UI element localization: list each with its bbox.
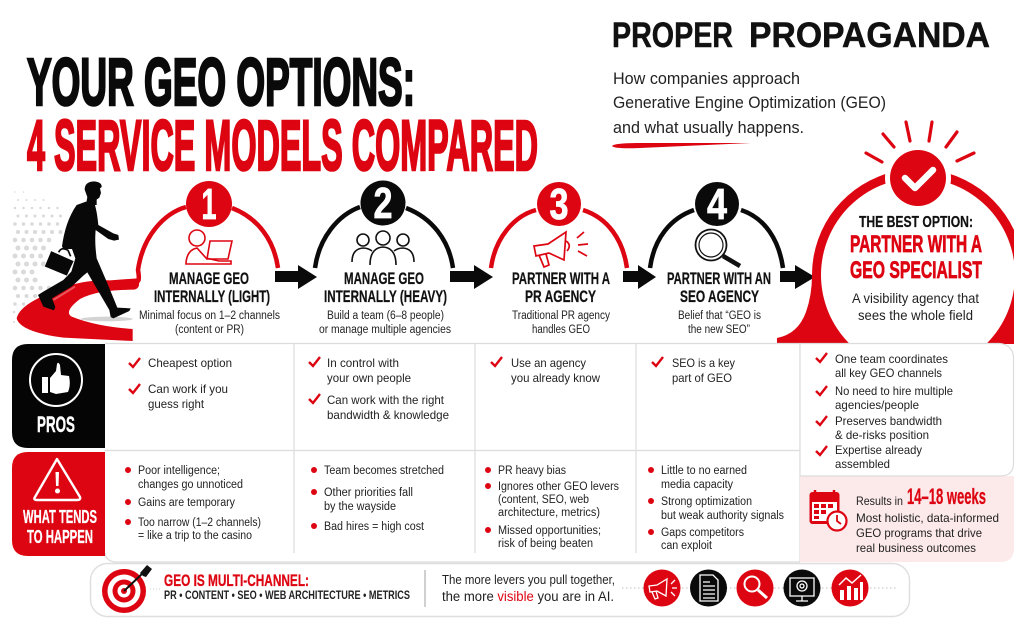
result text — [856, 484, 999, 555]
what tends to happen: column 2: by the wayside — [324, 501, 396, 513]
description: Belief that “GEO is — [678, 310, 761, 322]
title: YOUR GEO OPTIONS: — [27, 45, 415, 120]
number badge 3 — [537, 180, 581, 229]
heading: GEO IS MULTI-CHANNEL: — [164, 571, 309, 590]
number badge 3: 3 — [550, 180, 568, 229]
what tends to happen: column 2 — [311, 465, 444, 533]
what tends to happen: column 1: Too narrow (1–2 channels) — [138, 517, 261, 529]
bottom banner — [90, 564, 910, 616]
row label: pros: PROS — [37, 412, 75, 437]
pros: column 2: In control with — [327, 356, 399, 370]
row label: what tends to happen — [12, 452, 105, 556]
description — [139, 310, 280, 336]
panel: best option pros card — [800, 344, 1014, 476]
what tends to happen: column 4: Strong optimization — [661, 496, 752, 508]
halftone dots — [14, 192, 62, 322]
number badge 2: 2 — [374, 179, 392, 228]
what tends to happen: column 3: architecture, metrics) — [498, 507, 600, 519]
description — [852, 290, 979, 323]
number badge 1 — [186, 180, 232, 229]
pros: column 1 — [129, 356, 232, 411]
step 2: manage GEO internally (heavy) — [315, 179, 453, 336]
pros: column 3: Use an agency — [511, 356, 586, 370]
what tends to happen: column 2: Other priorities fall — [324, 487, 413, 499]
logo: Proper Propaganda: PROPAGANDA — [749, 16, 990, 55]
panel: result — [800, 476, 1014, 562]
heading — [154, 269, 270, 306]
heading: PARTNER WITH A — [512, 269, 610, 288]
heading — [512, 269, 610, 306]
description: Build a team (6–8 people) — [327, 310, 444, 322]
what tends to happen: column 4: Little to no earned — [661, 465, 747, 477]
row label: what tends to happen: WHAT TENDS — [23, 507, 97, 527]
title — [27, 45, 538, 186]
eyebrow: THE BEST OPTION: — [859, 214, 973, 231]
what tends to happen: column 3 — [485, 465, 619, 550]
icon: web architecture monitor — [784, 570, 820, 606]
pros: column 2: bandwidth & knowledge — [327, 408, 449, 422]
heading: INTERNALLY (HEAVY) — [324, 287, 447, 306]
pros: best option: One team coordinates — [835, 352, 948, 366]
heading: INTERNALLY (LIGHT) — [154, 287, 270, 306]
panel: best option — [777, 122, 1024, 372]
what tends to happen: column 1: = like a trip to the casino — [138, 530, 252, 542]
arrow 4 — [780, 265, 815, 289]
subtitle — [612, 69, 886, 148]
number badge 1: 1 — [202, 180, 216, 229]
arrow 2 — [450, 265, 493, 289]
number badge 2 — [360, 179, 406, 228]
figure: walking businessman — [38, 181, 131, 318]
heading — [667, 269, 771, 306]
description — [512, 310, 610, 336]
pros: column 4 — [652, 356, 735, 385]
description: Traditional PR agency — [512, 310, 610, 322]
pros: column 2: Can work with the right — [327, 393, 445, 407]
description: sees the whole field — [858, 307, 973, 323]
heading: PARTNER WITH AN — [667, 269, 771, 288]
what tends to happen: column 2: Team becomes stretched — [324, 465, 444, 477]
number badge 4: 4 — [707, 180, 727, 229]
description — [319, 310, 451, 336]
row label: pros — [12, 344, 105, 448]
logo: Proper Propaganda: PROPER — [612, 16, 733, 55]
step 1: manage GEO internally (light) — [137, 180, 280, 336]
result text: Most holistic, data-informed — [856, 511, 999, 525]
what tends to happen: column 2: Bad hires = high cost — [324, 521, 425, 533]
what tends to happen: column 3: risk of being beaten — [498, 538, 593, 550]
message — [442, 572, 615, 604]
arrow 1 — [275, 265, 317, 289]
icon: calendar and clock — [810, 490, 846, 530]
what tends to happen: column 3: PR heavy bias — [498, 465, 566, 477]
row label: what tends to happen: TO HAPPEN — [27, 527, 93, 547]
icon: metrics chart — [832, 570, 868, 606]
pros: column 4: SEO is a key — [672, 356, 735, 370]
subtitle: and what usually happens. — [613, 118, 804, 137]
pros: column 1: Cheapest option — [148, 356, 232, 370]
red path under walker — [17, 278, 139, 341]
description: (content or PR) — [175, 324, 244, 336]
pros: best option: & de-risks position — [835, 428, 929, 442]
what tends to happen: column 1: changes go unnoticed — [138, 479, 243, 491]
heading: PR AGENCY — [525, 287, 596, 306]
what tends to happen: column 1: Poor intelligence; — [138, 465, 220, 477]
heading: SEO AGENCY — [680, 287, 759, 306]
pros: best option: all key GEO channels — [835, 366, 942, 380]
description: or manage multiple agencies — [319, 324, 451, 336]
pros: best option: Expertise already — [835, 443, 922, 457]
message: The more levers you pull together, — [442, 572, 615, 587]
description: A visibility agency that — [852, 290, 979, 306]
result text: Results in — [856, 494, 903, 508]
pros: column 3: you already know — [511, 371, 600, 385]
what tends to happen: column 1 — [125, 465, 261, 542]
what tends to happen: column 4: but weak authority signals — [661, 510, 784, 522]
subtitle: Generative Engine Optimization (GEO) — [613, 93, 886, 112]
icon: SEO magnifier — [736, 570, 774, 606]
result text: real business outcomes — [856, 541, 976, 555]
what tends to happen: column 4: Gaps competitors — [661, 527, 744, 539]
result text: GEO programs that drive — [856, 526, 982, 540]
logo: Proper Propaganda — [612, 16, 990, 55]
pros: column 2 — [309, 356, 449, 422]
pros: best option: assembled — [835, 457, 890, 471]
pros: best option — [816, 352, 953, 471]
heading — [850, 231, 982, 284]
pros: best option: agencies/people — [835, 398, 919, 412]
icon: check badge with rays — [866, 122, 974, 211]
number badge 4 — [695, 180, 739, 229]
icon: content document — [690, 570, 727, 606]
pros: column 3 — [491, 356, 600, 385]
what tends to happen: column 3: (content, SEO, web — [498, 494, 589, 506]
step 3: partner with a PR agency — [491, 180, 627, 336]
pros: column 2: your own people — [327, 371, 411, 385]
heading: MANAGE GEO — [169, 269, 249, 288]
subtitle: How companies approach — [613, 69, 800, 88]
pros: column 4: part of GEO — [672, 371, 732, 385]
arrow 3 — [623, 265, 656, 289]
comparison table grid — [105, 343, 800, 562]
icon: target with arrow — [102, 565, 152, 613]
heading: MANAGE GEO — [344, 269, 424, 288]
description: the new SEO” — [688, 324, 750, 336]
what tends to happen: column 4: media capacity — [661, 479, 733, 491]
icon: megaphone — [534, 232, 588, 267]
heading — [324, 269, 447, 306]
icon: team of three — [352, 231, 414, 265]
what tends to happen: column 3: Missed opportunities; — [498, 525, 601, 537]
icon: magnifying glass — [696, 230, 740, 266]
description: handles GEO — [532, 324, 590, 336]
step 4: partner with an SEO agency — [650, 180, 783, 336]
description — [678, 310, 761, 336]
icon: person at laptop — [186, 230, 232, 264]
what tends to happen: column 4 — [648, 465, 784, 552]
description: Minimal focus on 1–2 channels — [139, 310, 280, 322]
pros: column 1: guess right — [148, 397, 205, 411]
pros: column 1: Can work if you — [148, 382, 228, 396]
message: the more visible you are in AI. — [442, 589, 614, 604]
what tends to happen: column 4: can exploit — [661, 540, 713, 552]
pros: best option: No need to hire multiple — [835, 384, 953, 398]
icon: PR megaphone — [644, 570, 680, 606]
what tends to happen: column 1: Gains are temporary — [138, 497, 235, 509]
channels list: PR • CONTENT • SEO • WEB ARCHITECTURE • METRICS — [164, 588, 410, 602]
what tends to happen: column 3: Ignores other GEO levers — [498, 481, 619, 493]
pros: best option: Preserves bandwidth — [835, 414, 942, 428]
